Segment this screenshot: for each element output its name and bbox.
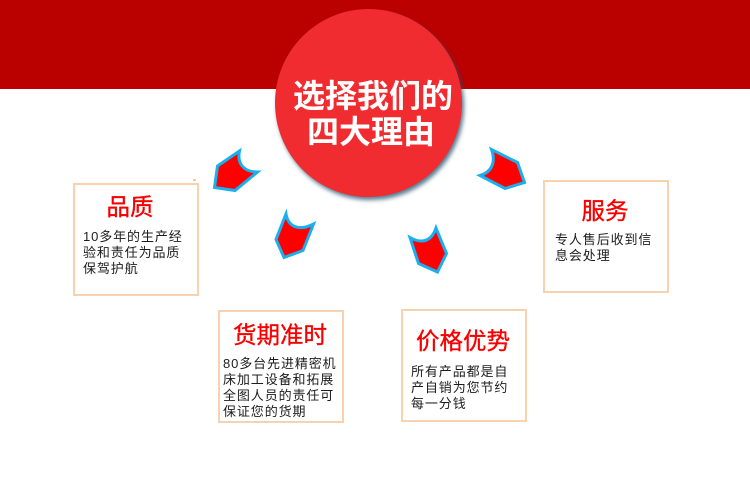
text: price: 产自销为您节约 bbox=[411, 380, 508, 395]
panel: quality bbox=[73, 183, 199, 296]
header red band bbox=[0, 0, 750, 89]
heading: service: 服务 bbox=[582, 198, 628, 224]
panel: delivery bbox=[218, 310, 344, 423]
text: quality bbox=[83, 229, 183, 276]
text: delivery: 全图人员的责任可 bbox=[223, 388, 334, 403]
heading: quality: 品质 bbox=[106, 194, 154, 220]
text: service bbox=[555, 232, 652, 263]
text: delivery: 床加工设备和拓展 bbox=[223, 372, 334, 387]
text: price bbox=[411, 364, 508, 411]
text: quality: 保驾护航 bbox=[83, 261, 139, 276]
panel: service bbox=[543, 180, 669, 293]
panel: price bbox=[401, 309, 527, 422]
text: service: 专人售后收到信 bbox=[555, 232, 652, 247]
arrow: to quality bbox=[214, 151, 258, 190]
circle title: 选择我们的 bbox=[293, 78, 453, 114]
text: quality: 验和责任为品质 bbox=[83, 245, 180, 260]
text: price: 每一分钱 bbox=[411, 396, 467, 411]
text: delivery: 保证您的货期 bbox=[223, 404, 306, 419]
heading: price: 价格优势 bbox=[416, 328, 510, 354]
text: quality: 10多年的生产经 bbox=[83, 229, 183, 244]
center circle bbox=[275, 9, 462, 197]
circle title bbox=[293, 78, 453, 150]
text: price: 所有产品都是自 bbox=[411, 364, 508, 379]
arrow: to price bbox=[410, 228, 446, 272]
text: service: 息会处理 bbox=[555, 248, 611, 263]
text: delivery: 80多台先进精密机 bbox=[223, 356, 337, 371]
arrow: to service bbox=[480, 150, 524, 188]
heading: delivery: 货期准时 bbox=[233, 322, 327, 348]
corner tick bbox=[193, 179, 196, 181]
circle title: 四大理由 bbox=[307, 114, 435, 150]
text: delivery bbox=[223, 356, 337, 419]
arrow: to delivery bbox=[276, 214, 314, 258]
